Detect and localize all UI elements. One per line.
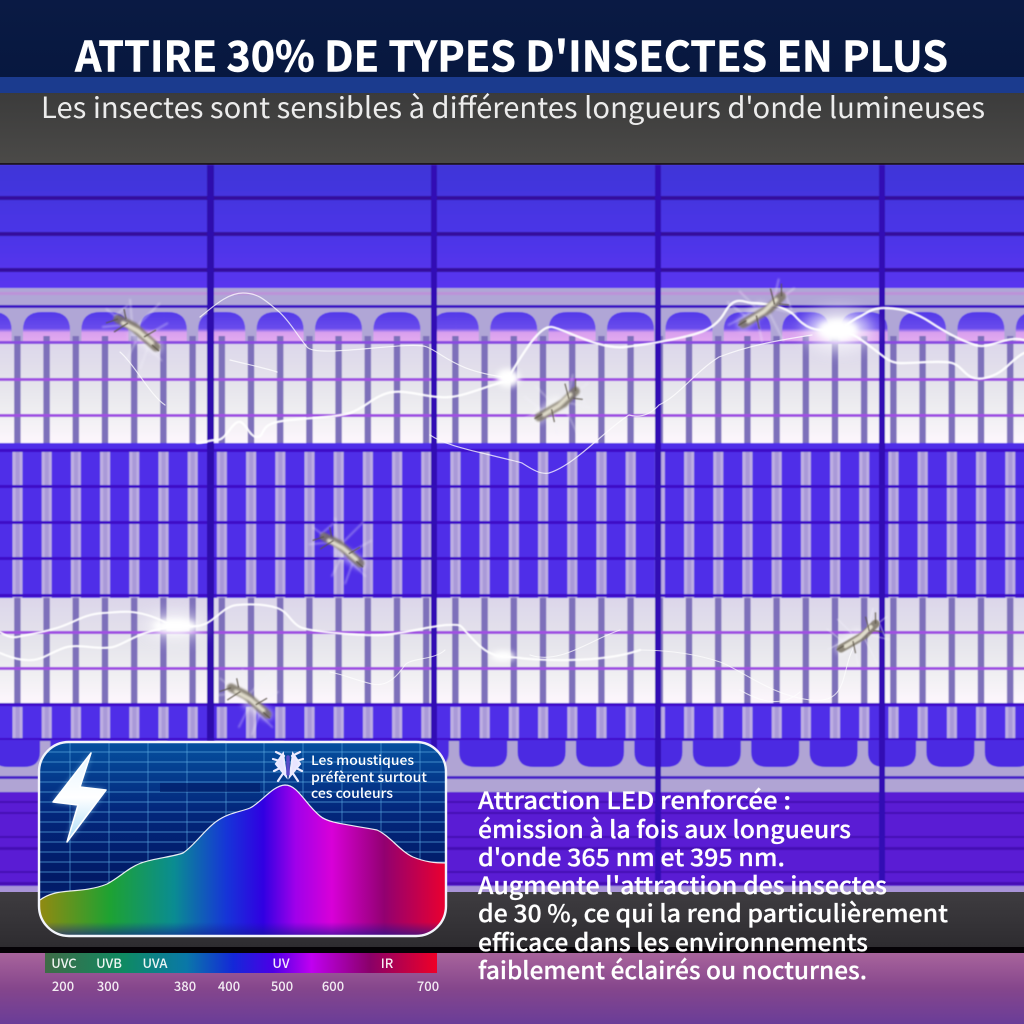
purple lower housing xyxy=(0,792,1024,893)
lavender rail with top arches xyxy=(0,288,1024,343)
text block: LED attraction description: efficace dans les environnements xyxy=(478,923,868,958)
mosquito 5 xyxy=(819,596,897,672)
legend band labels: IR xyxy=(381,953,394,972)
text block: LED attraction description: faiblement éclairés ou nocturnes. xyxy=(478,951,867,986)
upper bolts xyxy=(197,301,1024,443)
mosquito 4 xyxy=(309,518,372,584)
lower blue panels with bottom arches xyxy=(0,703,1024,792)
blue panels with light bars xyxy=(0,443,1024,599)
legend wavelength numbers: 380 xyxy=(174,976,196,995)
mosquito 3 xyxy=(516,362,598,442)
icon: lightning bolt xyxy=(53,753,106,842)
legend band labels xyxy=(51,953,394,972)
title: ATTIRE 30% DE TYPES D'INSECTES EN PLUS xyxy=(74,24,948,84)
icon: mosquito xyxy=(273,752,303,781)
legend wavelength numbers: 300 xyxy=(97,976,119,995)
legend wavelength numbers: 400 xyxy=(218,976,240,995)
legend wavelength numbers: 600 xyxy=(322,976,344,995)
card caption xyxy=(311,750,427,802)
text block: LED attraction description: d'onde 365 nm et 395 nm. xyxy=(478,838,785,873)
legend band labels: UVC xyxy=(51,953,77,972)
legend wavelength numbers: 700 xyxy=(417,976,439,995)
vertical posts xyxy=(207,165,885,885)
upper blue panels xyxy=(0,165,1024,290)
panel: spectrum chart card xyxy=(39,742,446,937)
card caption: Les moustiques xyxy=(311,750,414,769)
legend wavelength numbers xyxy=(52,976,439,995)
text block: LED attraction description: de 30 %, ce qui la rend particulièrement xyxy=(478,894,949,929)
bottom dark band xyxy=(0,892,1024,1024)
arc glow spots xyxy=(145,310,872,661)
panel: UV lamp grid xyxy=(0,165,1024,893)
text block: LED attraction description: Attraction LED renforcée : xyxy=(478,781,791,816)
mosquito 6 xyxy=(216,669,278,735)
mosquito 2 xyxy=(718,266,805,350)
legend band labels: UV xyxy=(272,953,290,972)
thin upper bolts xyxy=(120,293,812,473)
legend: spectrum bar xyxy=(45,953,439,995)
text block: LED attraction description xyxy=(478,781,949,986)
chart background and grid xyxy=(40,743,445,899)
legend wavelength numbers: 200 xyxy=(52,976,74,995)
card border xyxy=(39,742,446,936)
glowing band 2 xyxy=(0,598,1024,703)
legend wavelength numbers: 500 xyxy=(271,976,293,995)
electric arcs xyxy=(0,293,1024,702)
card caption: préfèrent surtout xyxy=(311,767,427,786)
legend band labels: UVA xyxy=(142,953,168,972)
text block: LED attraction description: émission à la fois aux longueurs xyxy=(478,810,851,845)
subtitle: Les insectes sont sensibles à différentes longueurs d'onde lumineuses xyxy=(41,85,985,127)
text block: LED attraction description: Augmente l'attraction des insectes xyxy=(478,866,887,901)
glowing band 1 xyxy=(0,336,1024,444)
legend band labels: UVB xyxy=(96,953,122,972)
mosquito 1 xyxy=(102,299,168,369)
lower bolts xyxy=(0,604,640,660)
card caption: ces couleurs xyxy=(311,783,393,802)
spectrum curve xyxy=(39,785,446,937)
thin lower bolts xyxy=(330,630,855,702)
insects: mosquitoes xyxy=(102,266,897,735)
